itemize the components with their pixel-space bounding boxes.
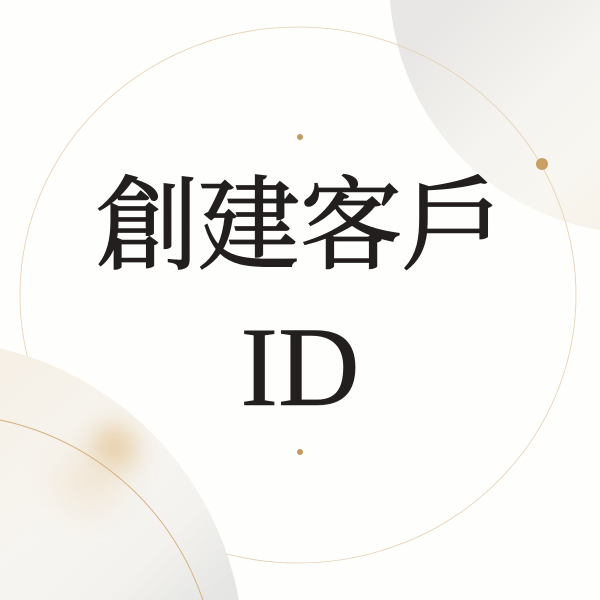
title line 2: ID [240,305,360,430]
decorative circle: bottom left [0,348,239,600]
thin arc: bottom left [0,420,203,600]
decorative circle: top right [390,0,600,230]
dot: on ring right [536,158,548,170]
dot: bottom center [297,449,303,455]
dot: top center [297,134,303,140]
title line 1: 創建客戶 [96,171,504,284]
